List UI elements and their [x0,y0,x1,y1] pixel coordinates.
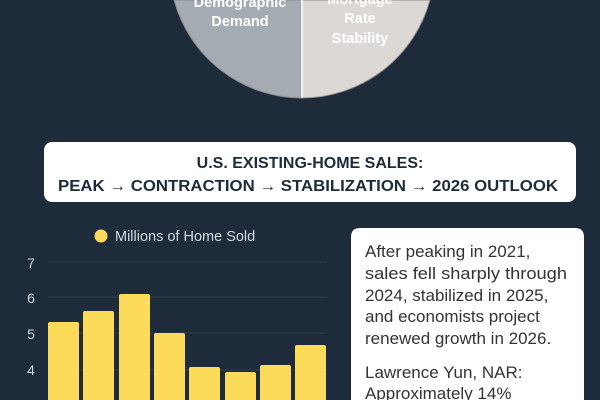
bar chart: millions of homes sold [27,229,327,400]
text box: summary and forecast: 2024, stabilized in 2025, [365,286,548,305]
text box: summary and forecast: and economists project [365,307,540,326]
title box: U.S. EXISTING-HOME SALES: [197,155,423,172]
legend: Millions of Home Sold [115,229,255,245]
pie chart: factors: Demand [211,14,269,30]
y axis labels: 4 [27,362,35,378]
text box: summary and forecast [351,228,584,400]
pie chart: factors: Rate [344,11,376,27]
bars [48,294,326,400]
title box [44,142,576,202]
y axis labels: 7 [27,255,35,271]
text box: summary and forecast: sales fell sharply through [365,264,567,283]
title box: PEAK → CONTRACTION → STABILIZATION → 2026 OUTLOOK [58,178,558,195]
text box: summary and forecast: After peaking in 2021, [365,242,530,261]
y axis labels: 5 [27,326,35,342]
y axis labels: 6 [27,290,35,306]
text box: summary and forecast: renewed growth in 2026. [365,329,551,348]
y axis labels [27,255,35,378]
pie chart: factors [174,0,430,98]
pie chart: factors: Stability [332,31,388,47]
text box: summary and forecast: Lawrence Yun, NAR: [365,363,522,382]
